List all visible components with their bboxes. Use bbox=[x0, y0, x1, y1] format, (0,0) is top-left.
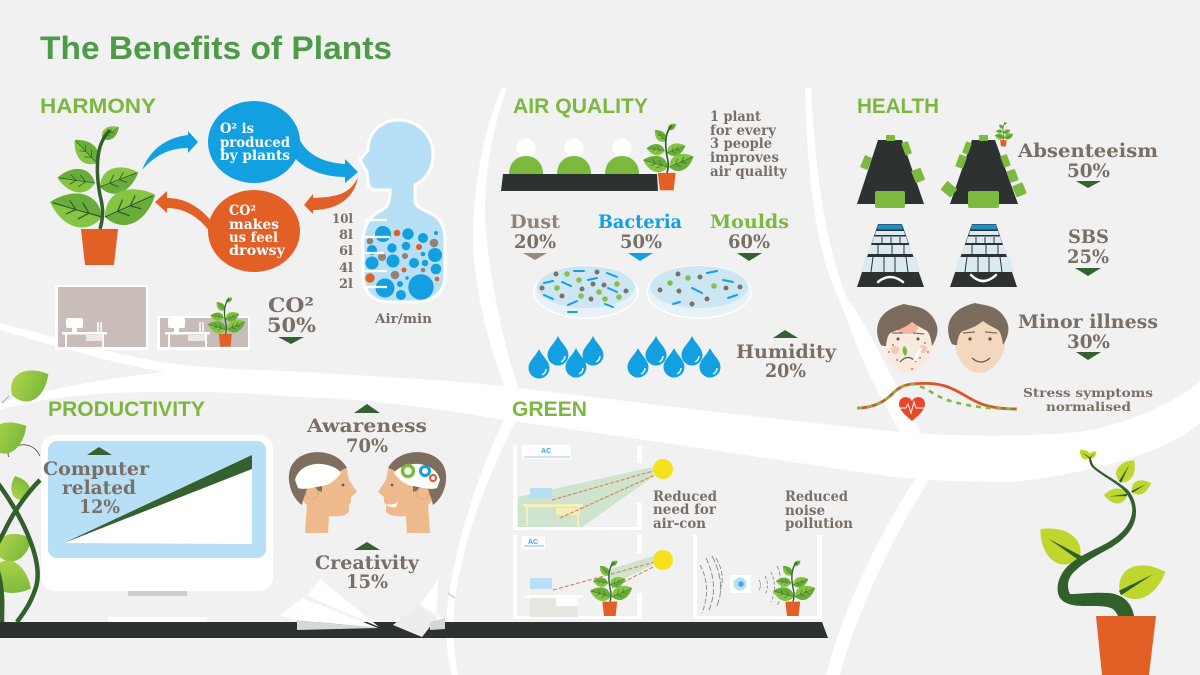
panel: air quality bbox=[501, 95, 837, 382]
text: one plant per three people: 1 plant bbox=[710, 109, 762, 125]
carbon dioxide bubble: makes bbox=[229, 217, 279, 233]
stat: absenteeism: Absenteeism bbox=[1017, 140, 1158, 162]
text: stress symptoms normalised bbox=[1023, 385, 1153, 414]
text: stress symptoms normalised: normalised bbox=[1046, 399, 1131, 414]
carbon dioxide bubble: us feel bbox=[229, 230, 278, 246]
stat: dust: Dust bbox=[510, 211, 560, 233]
heading: air quality: AIR QUALITY bbox=[513, 95, 648, 118]
oxygen bubble: by plants bbox=[220, 148, 290, 164]
decorative plant: right potted vine bbox=[1030, 447, 1171, 675]
stat: bacteria: 50% bbox=[620, 231, 662, 253]
petri dish: before bbox=[534, 266, 638, 318]
title: The Benefits of Plants bbox=[40, 30, 392, 66]
icon: full meeting table with plant bbox=[940, 121, 1027, 208]
icon: sick face bbox=[877, 304, 938, 373]
icon: computer monitor with chart bbox=[41, 435, 273, 622]
stat: computer related bbox=[43, 447, 150, 518]
icon: large plant bbox=[46, 122, 162, 265]
arrow: orange body to bubble bbox=[304, 177, 358, 214]
text: one plant per three people: air quality bbox=[710, 164, 788, 180]
carbon dioxide bubble: drowsy bbox=[229, 243, 286, 259]
lung capacity labels: 2l bbox=[339, 277, 353, 292]
stat: SBS: 25% bbox=[1067, 246, 1109, 268]
stat: moulds bbox=[710, 211, 789, 261]
stat: SBS: SBS bbox=[1068, 226, 1109, 248]
icon: healthy face bbox=[948, 303, 1009, 373]
stat: SBS bbox=[1067, 226, 1109, 276]
heading: green: GREEN bbox=[512, 398, 587, 421]
desk bar bbox=[0, 622, 828, 638]
lung capacity labels bbox=[332, 212, 353, 292]
text: one plant per three people: for every bbox=[710, 123, 777, 139]
icon: human torso with air bubbles bbox=[360, 120, 445, 302]
text: one plant per three people bbox=[710, 109, 788, 180]
stat: CO2 50% bbox=[267, 293, 316, 344]
stat: creativity bbox=[315, 542, 420, 593]
office with plant bbox=[157, 296, 250, 350]
people around table with plant bbox=[501, 122, 697, 191]
stat: moulds: Moulds bbox=[710, 211, 789, 233]
lung capacity labels: 4l bbox=[339, 261, 353, 276]
office without plant bbox=[55, 285, 148, 350]
text: reduced need for air-con: Reduced bbox=[653, 489, 718, 505]
text: reduced noise pollution: Reduced bbox=[785, 489, 849, 505]
icon: water drops after bbox=[628, 336, 720, 378]
stat: humidity: 20% bbox=[765, 360, 806, 382]
label: air per minute: Air/min bbox=[374, 312, 433, 327]
text: stress symptoms normalised: Stress symptoms bbox=[1023, 385, 1153, 400]
heading: health: HEALTH bbox=[857, 95, 939, 118]
text: one plant per three people: 3 people bbox=[710, 136, 772, 152]
oxygen bubble: produced bbox=[220, 135, 291, 151]
stat: awareness: 70% bbox=[346, 435, 388, 457]
lung capacity labels: 10l bbox=[332, 212, 353, 227]
icon: paper plane two bbox=[393, 580, 455, 637]
text: reduced noise pollution: noise bbox=[785, 503, 825, 519]
stat: awareness bbox=[306, 404, 427, 457]
oxygen bubble bbox=[208, 101, 358, 183]
text: reduced need for air-con: need for bbox=[653, 502, 717, 518]
petri dish: after bbox=[647, 266, 751, 318]
stat: absenteeism: 50% bbox=[1067, 160, 1110, 182]
icon: heart bbox=[899, 397, 925, 421]
stat: awareness: Awareness bbox=[306, 415, 427, 437]
heading: harmony: HARMONY bbox=[40, 95, 156, 118]
illustration: room with plant bbox=[513, 535, 673, 619]
panel: green bbox=[512, 398, 853, 619]
text: one plant per three people: improves bbox=[710, 150, 779, 166]
icon: sparse meeting table bbox=[857, 135, 925, 208]
stat: dust bbox=[510, 211, 560, 260]
panel: harmony bbox=[40, 95, 445, 350]
text: reduced noise pollution: pollution bbox=[785, 516, 853, 532]
stat: creativity: Creativity bbox=[315, 552, 420, 574]
heading: productivity: PRODUCTIVITY bbox=[48, 398, 205, 421]
panel: productivity bbox=[41, 398, 446, 622]
text: reduced need for air-con bbox=[653, 489, 718, 532]
stat: CO2 50%: 50% bbox=[267, 313, 316, 337]
decorative plant: left vine bbox=[0, 361, 56, 622]
lung capacity labels: 6l bbox=[339, 244, 353, 259]
stat: minor illness: 30% bbox=[1067, 331, 1110, 353]
panel: health bbox=[857, 95, 1158, 421]
stat: computer related: 12% bbox=[79, 496, 120, 518]
lung capacity labels: 8l bbox=[339, 228, 353, 243]
stat: minor illness bbox=[1018, 311, 1158, 360]
arrow: blue plant to oxygen bbox=[142, 131, 198, 170]
icon: happy office grid bbox=[950, 224, 1017, 287]
stat: dust: 20% bbox=[514, 231, 556, 253]
oxygen bubble: O² is bbox=[220, 121, 254, 137]
icon: head with blank brain bbox=[289, 452, 357, 533]
icon: unhappy office grid bbox=[857, 224, 924, 287]
illustration: room without plant: AC bbox=[541, 448, 551, 455]
icon: paper plane one bbox=[280, 579, 379, 630]
stat: computer related: Computer bbox=[43, 458, 150, 480]
carbon dioxide bubble bbox=[155, 190, 300, 272]
stat: bacteria bbox=[598, 211, 682, 261]
stat: humidity bbox=[736, 330, 837, 382]
stat: CO2 50%: CO² bbox=[268, 293, 314, 317]
illustration: room without plant bbox=[513, 445, 673, 530]
icon: head with active brain bbox=[378, 452, 446, 533]
stat: moulds: 60% bbox=[728, 231, 770, 253]
stat: absenteeism bbox=[1017, 140, 1158, 188]
illustration: noise room with plant bbox=[693, 535, 822, 619]
text: reduced need for air-con: air-con bbox=[653, 516, 706, 532]
carbon dioxide bubble: CO² bbox=[229, 203, 256, 219]
stat: minor illness: Minor illness bbox=[1018, 311, 1158, 333]
text: reduced noise pollution bbox=[785, 489, 853, 532]
stat: humidity: Humidity bbox=[736, 341, 837, 363]
icon: water drops before bbox=[528, 336, 604, 378]
stat: computer related: related bbox=[62, 477, 136, 499]
stat: bacteria: Bacteria bbox=[598, 211, 682, 233]
illustration: room with plant: AC bbox=[528, 539, 538, 546]
stat: creativity: 15% bbox=[346, 571, 388, 593]
chart: stress curve bbox=[857, 383, 1017, 409]
